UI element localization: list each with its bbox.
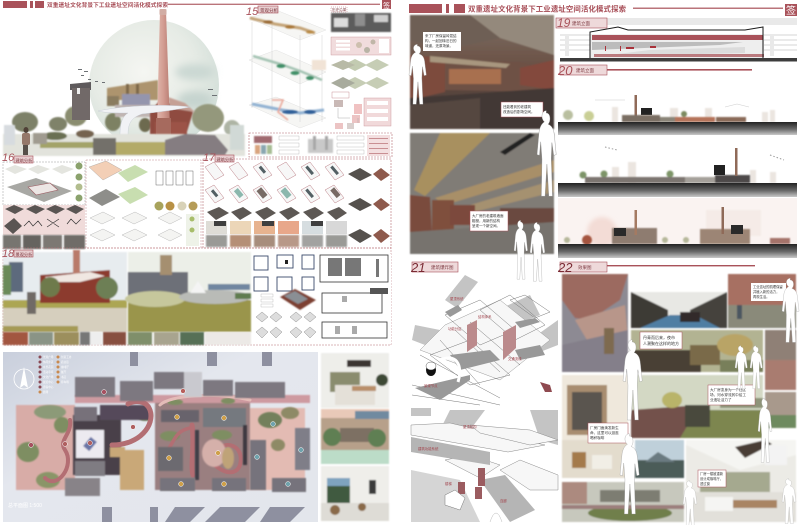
plan fills — [211, 166, 341, 199]
legend: 游客中心 — [43, 385, 54, 389]
axonometric lower: 连廊 — [500, 498, 507, 503]
photo: village view — [635, 440, 684, 478]
legend: 剧场 — [43, 390, 49, 394]
render: plaza — [125, 252, 251, 332]
pink strategy panel — [3, 205, 85, 235]
heading 18: 18 — [2, 248, 15, 260]
heading 21: 建筑爆炸图 — [431, 264, 454, 271]
birds — [78, 69, 217, 96]
photo: lobby — [321, 353, 389, 408]
heading 21 — [410, 260, 458, 275]
legend: 咖啡厅 — [61, 365, 69, 369]
site nodes — [29, 389, 303, 486]
elevation two — [558, 147, 797, 197]
pink chart panel — [331, 37, 391, 55]
callout: courtyard: 工业遗址的肌理保留 — [753, 284, 783, 289]
silhouette: pair market — [735, 346, 762, 389]
callout: hall — [470, 211, 508, 231]
legend: 水景花园 — [43, 365, 54, 369]
callout: hall: 大厂房的老建筑墙面 — [472, 213, 504, 218]
heading 22: 22 — [557, 260, 573, 275]
dark central massing — [65, 405, 150, 496]
legend: 创意工坊 — [61, 355, 72, 359]
central gardens — [158, 408, 246, 480]
photo: lawn — [562, 482, 684, 522]
heading 15 — [246, 6, 278, 18]
axonometric upper: 结构体系 — [478, 314, 492, 319]
orange circulation layer — [250, 18, 315, 34]
photo: auditorium — [410, 15, 554, 129]
clock tower — [70, 82, 91, 120]
right title bar: 双重遗址文化背景下工业遗址空间活化模式探索 — [468, 4, 627, 14]
heading 17: 17 — [203, 152, 216, 164]
sky circle — [89, 20, 219, 150]
heading 17 — [203, 152, 234, 164]
heading 22 — [557, 260, 755, 275]
legend: 停车场 — [61, 380, 69, 384]
history label: 历史沿革 — [332, 7, 347, 12]
section 19 — [556, 16, 797, 62]
photo: water street — [631, 292, 727, 328]
callout: lobby: 透过窗 — [700, 481, 711, 486]
axonometric lower: 屋顶结构 — [463, 424, 477, 429]
analysis strip — [249, 133, 392, 157]
heading 20: 20 — [557, 63, 573, 78]
photo: green terrace — [321, 409, 389, 464]
photo: living room — [321, 466, 389, 521]
legend — [38, 355, 72, 394]
silhouette: standing coat — [623, 340, 642, 420]
white canopy — [98, 105, 190, 135]
heading 20: 建筑立面 — [576, 67, 594, 74]
heading 18: 景观分析 — [16, 251, 32, 258]
section 21 exploded axonometric — [410, 260, 558, 522]
callout: heritage: 味道，还原场景。 — [425, 43, 453, 48]
callout: canal — [708, 385, 755, 405]
right column analysis — [331, 7, 391, 129]
left poster — [2, 0, 392, 522]
heading 20 — [557, 63, 752, 78]
render: brick hall — [3, 250, 127, 332]
callout: lobby — [698, 470, 726, 487]
hero rendering — [3, 9, 245, 156]
heading 19: 建筑立面 — [572, 20, 590, 27]
silhouette: pair — [514, 220, 545, 281]
iso cubes — [348, 168, 390, 243]
axonometric upper: 功能分区 — [448, 326, 462, 331]
legend: 休闲步道 — [43, 360, 54, 364]
cross section — [560, 18, 797, 62]
heading 21: 21 — [410, 260, 425, 275]
callout: market — [640, 332, 682, 349]
callout: canal: 大厂房变身为一个社区 — [710, 387, 746, 392]
left title bar: 签 — [383, 1, 390, 10]
green planting layer — [253, 56, 326, 80]
callout: courtyard: 并植入新的活力， — [753, 289, 779, 294]
surrounding shadows — [102, 352, 305, 522]
heading 17: 建筑分析 — [216, 156, 233, 163]
heading 15: 景观分析 — [260, 7, 278, 14]
callout: shop — [588, 423, 628, 443]
photo: canal garden — [631, 375, 763, 438]
callout: canal: 场，河水穿流其中给工 — [710, 392, 746, 397]
callout: theatre: 还能看到的老建筑 — [503, 104, 531, 109]
archive photo — [331, 13, 391, 32]
visitor figure — [22, 127, 30, 155]
legend: 景观广场 — [43, 355, 54, 359]
axonometric lower — [411, 408, 558, 522]
flow chart — [332, 92, 391, 129]
wooden building — [107, 80, 158, 117]
layer planes — [249, 10, 326, 128]
section 15 landscape axonometric — [246, 6, 326, 128]
legend: 书店 — [61, 375, 67, 379]
silhouette: woman left — [409, 44, 426, 104]
photo: shop interior — [562, 375, 628, 478]
left title bar: 双重遗址文化背景下工业遗址空间活化模式探索 — [47, 1, 168, 9]
callout: hall: 呈现一个新空间。 — [472, 223, 500, 228]
site plan — [3, 352, 318, 522]
photo: covered walk — [562, 274, 628, 372]
flowing ribbons — [45, 395, 250, 481]
callout: heritage: 构，一起回味旧日的 — [425, 38, 457, 43]
callout: hall: 粗糙，用新的结构 — [472, 218, 500, 223]
text boxes — [279, 136, 364, 154]
callout: lobby: 设计成咖啡厅， — [700, 476, 723, 481]
site photos — [3, 235, 85, 249]
street sketch — [308, 136, 333, 153]
section strips — [206, 235, 347, 247]
legend: 文化广场 — [43, 375, 54, 379]
callout: market: 丹青而后来，夜市 — [643, 334, 675, 340]
section 16 building analysis — [2, 152, 201, 249]
callout: market: 人潮聚在这样的地方 — [643, 340, 679, 346]
right title bar — [409, 4, 797, 17]
legend: 活动草坪 — [43, 370, 54, 374]
dark roof row — [207, 207, 347, 220]
heading 19: 19 — [557, 16, 571, 30]
callout: theatre: 改造后的剧场空间。 — [503, 109, 534, 114]
silhouette: lobby figures — [683, 479, 796, 525]
south row buildings — [160, 428, 310, 492]
plaza iso panel — [3, 162, 85, 205]
plan caption: 总平面图 1:500 — [8, 502, 42, 509]
floor plans — [318, 254, 391, 344]
olive trees — [12, 104, 240, 136]
axonometric lower: 楼梯 — [445, 481, 452, 486]
photos: right column — [765, 330, 796, 428]
thumbnail strip — [3, 332, 251, 345]
callout: lobby: 厂房一楼被重新 — [700, 471, 724, 476]
left title bar — [3, 0, 391, 10]
photo: bright lobby — [686, 440, 796, 522]
photo: hall ceiling — [410, 133, 554, 254]
brick hall — [150, 97, 195, 138]
pink stats — [367, 135, 390, 156]
callout: courtyard: 再现生活。 — [753, 294, 769, 299]
elevation three — [558, 198, 797, 258]
colour diagrams — [206, 221, 347, 234]
heading 18 — [2, 248, 33, 260]
photo: market — [631, 330, 763, 372]
heading 16 — [2, 152, 33, 164]
axonometric upper — [412, 275, 558, 405]
section 20 — [557, 63, 797, 258]
green site diamonds — [331, 59, 389, 89]
elevation one — [558, 95, 797, 135]
silhouette: right edge — [758, 278, 799, 462]
right title bar: 签 — [786, 4, 796, 17]
heading 19 — [556, 16, 607, 30]
callout: shop: 命，这里可以逛逛 — [590, 430, 619, 435]
axonometric lower: 建筑功能系统 — [418, 446, 439, 451]
callout: heritage: 来了厂房保留砖混结 — [425, 33, 457, 38]
interior photos — [321, 353, 389, 521]
legend: 餐厅 — [61, 370, 67, 374]
axonometric upper: 交通流线 — [508, 356, 522, 361]
section 22 renderings — [557, 260, 799, 525]
people icons — [254, 136, 272, 154]
north arrow — [14, 367, 34, 389]
programme diagrams — [86, 160, 201, 248]
axonometric upper: 景观节点 — [424, 383, 438, 388]
heading 15: 15 — [246, 6, 259, 18]
callout: canal: 业遗址活力了 — [710, 397, 732, 402]
blue water layer — [252, 100, 324, 120]
heading 16: 16 — [2, 152, 15, 164]
foreground planting — [3, 125, 245, 156]
iso building — [280, 289, 316, 310]
legend: 展览中心 — [43, 380, 54, 384]
heading 16: 建筑分析 — [16, 157, 32, 164]
green lawns — [17, 398, 299, 488]
section 17 building analysis — [203, 152, 391, 248]
callout: theatre — [501, 102, 543, 117]
unit plans — [254, 255, 316, 338]
section 18 landscape renderings — [2, 248, 391, 345]
callout: heritage — [423, 32, 461, 51]
callout: shop: 喝杯咖啡 — [590, 435, 605, 440]
chimney — [156, 9, 171, 135]
right poster — [409, 4, 799, 525]
callout: shop: 厂房门面焕发新生 — [590, 425, 619, 430]
vertical guides — [252, 20, 322, 122]
silhouette: walking man — [620, 434, 639, 514]
legend: 商业街 — [61, 360, 69, 364]
photo: red courtyard — [728, 274, 796, 328]
heading 22: 效果图 — [578, 264, 592, 271]
axonometric upper: 屋顶系统 — [450, 296, 464, 301]
silhouette: man centre — [537, 111, 556, 196]
rotated plan cards — [205, 162, 344, 203]
pink ground — [16, 395, 310, 490]
callout: courtyard — [751, 283, 786, 301]
north row buildings — [75, 372, 285, 401]
